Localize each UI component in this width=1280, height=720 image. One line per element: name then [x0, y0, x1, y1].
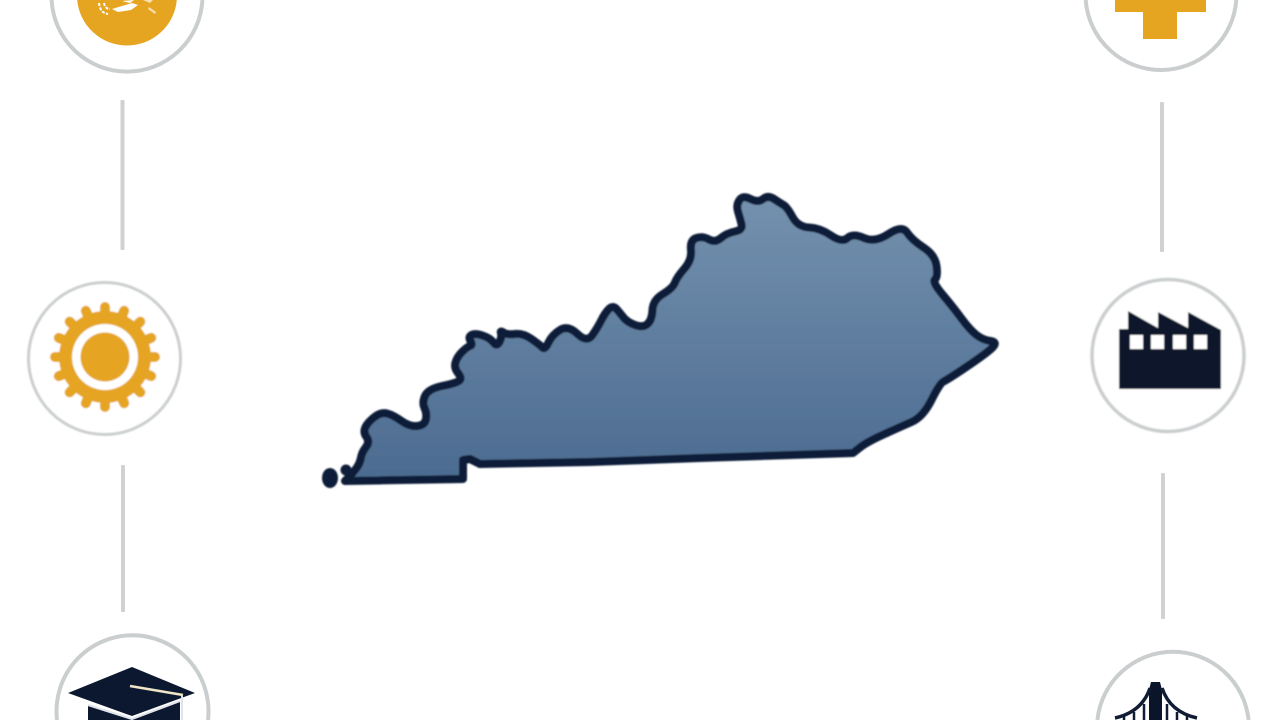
connector line: bottom left	[121, 465, 125, 612]
icon: gear badge, middle left	[28, 282, 180, 434]
icon: bridge badge, bottom right	[1097, 652, 1249, 720]
map: small river island dot	[340, 464, 352, 476]
map: Kentucky state outline	[322, 197, 995, 488]
icon: graduation cap badge, bottom left	[56, 635, 208, 720]
connector line: top right	[1160, 102, 1164, 252]
icon: agriculture badge, top left	[52, 0, 202, 72]
connector line: bottom right	[1161, 473, 1165, 619]
icon: factory badge, middle right	[1092, 280, 1244, 432]
connector line: top left	[120, 100, 124, 250]
map: western exclave dot	[322, 468, 338, 488]
icon: medical cross badge, top right	[1086, 0, 1236, 70]
